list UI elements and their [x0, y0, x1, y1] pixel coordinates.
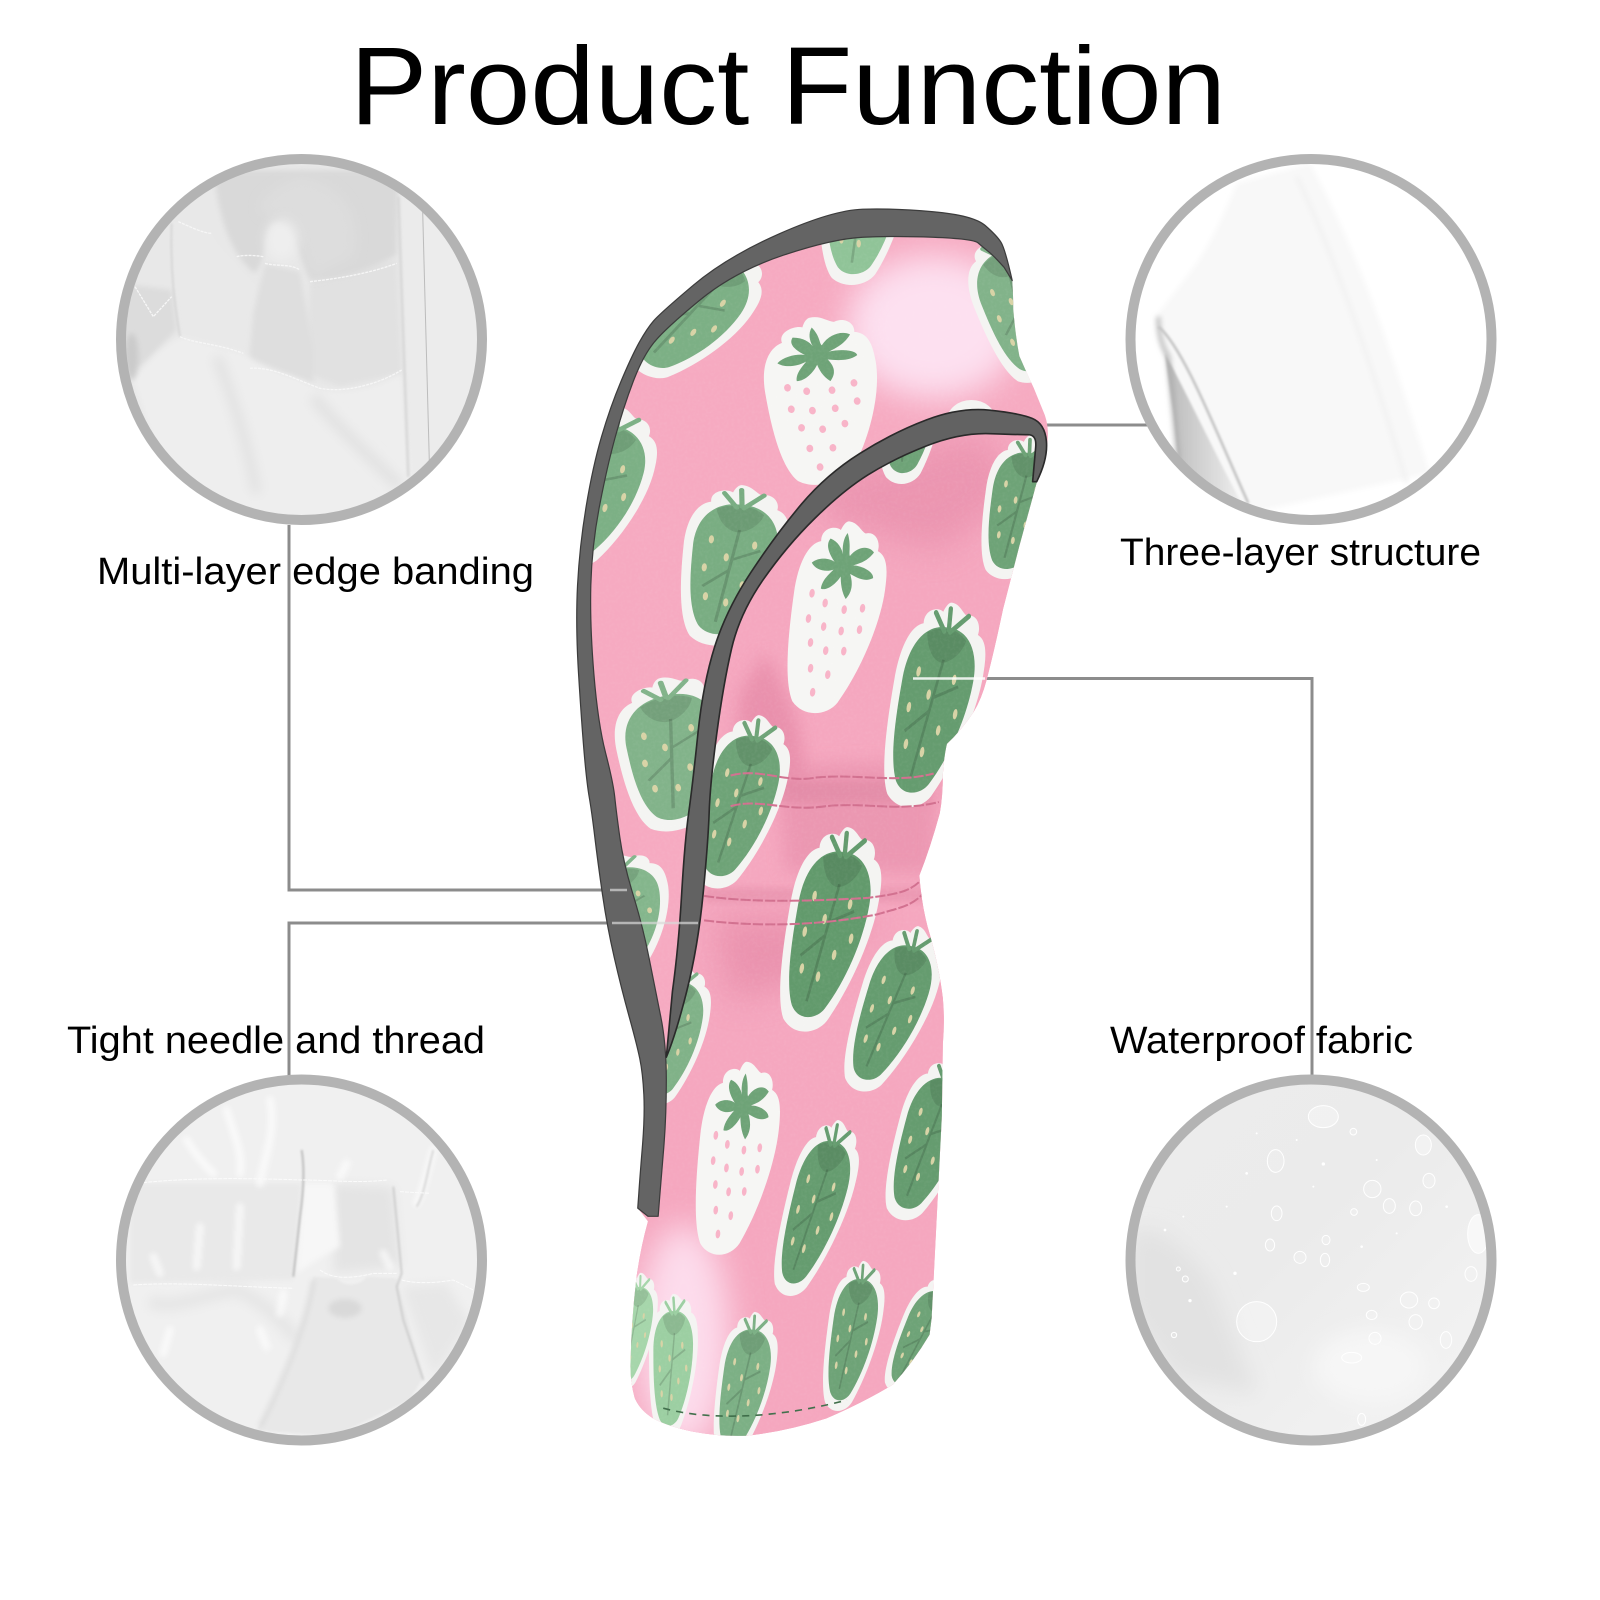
label: waterproof fabric: Waterproof fabric	[1110, 1020, 1413, 1062]
leather grain	[785, 858, 905, 1412]
detail circle: waterproof fabric close-up	[1120, 1070, 1510, 1450]
label: multi-layer edge banding: Multi-layer edge banding	[97, 551, 534, 593]
front panel strawberries	[608, 332, 1067, 1463]
label: three-layer structure: Three-layer structure	[1120, 532, 1481, 574]
label: tight needle and thread: Tight needle and thread	[67, 1020, 485, 1062]
title: Product Function	[350, 25, 1226, 148]
connector: three-layer structure	[1046, 424, 1148, 426]
connector: tight needle and thread	[289, 923, 612, 1076]
connector: waterproof fabric	[985, 678, 1312, 1076]
detail circle: needle and thread close-up	[110, 1070, 500, 1450]
connector overlays on product	[610, 678, 985, 923]
product: pink strawberry golf head cover	[576, 208, 1048, 1436]
back panel strawberries	[533, 133, 1089, 981]
front arch piping	[666, 410, 1047, 1057]
front panel shading	[704, 434, 1020, 1000]
detail circle: edge banding close-up	[110, 150, 500, 530]
back piping	[577, 209, 1012, 1216]
front panel	[630, 434, 1037, 1436]
connector: multi-layer edge banding	[289, 525, 610, 890]
back panel	[591, 237, 1048, 1436]
detail circle: three-layer structure close-up	[1120, 150, 1510, 530]
